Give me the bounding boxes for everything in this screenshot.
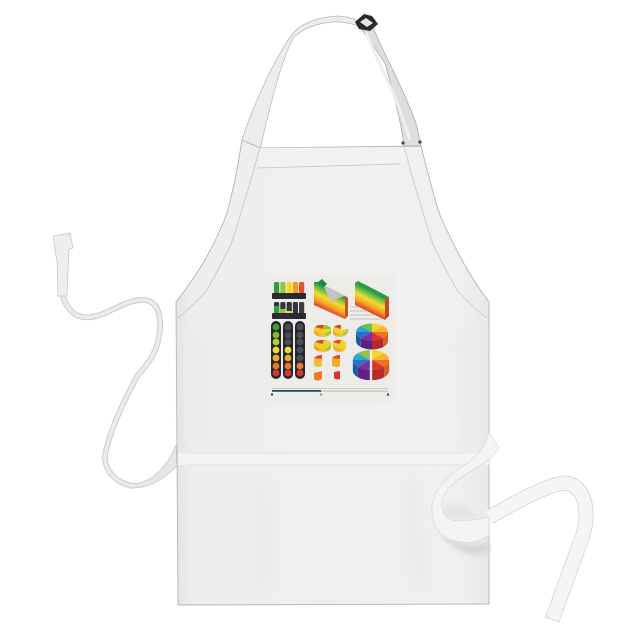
traffic light column 2 <box>283 321 293 379</box>
ring segments <box>314 325 348 380</box>
print background <box>265 275 395 403</box>
right half of exploded pie <box>372 350 389 380</box>
exploded 3D pie chart <box>353 350 389 380</box>
3D pie chart <box>356 324 388 350</box>
left armhole hem <box>178 148 260 318</box>
progress slider <box>270 388 390 396</box>
strap slider knot <box>355 14 378 31</box>
left half of exploded pie <box>353 350 370 380</box>
bib hem <box>258 147 408 168</box>
traffic light column 3 <box>295 321 305 379</box>
right tie front loop <box>432 432 586 622</box>
test tube rack: upper <box>272 282 306 299</box>
right tie back section <box>489 483 586 620</box>
waist pocket band <box>178 453 489 465</box>
isometric area chart <box>314 279 348 319</box>
left neck strap <box>242 16 358 150</box>
test tube rack: lower <box>272 302 306 319</box>
left tie <box>53 233 177 488</box>
right armhole hem <box>404 147 487 318</box>
soft fabric folds <box>195 330 468 590</box>
apron body <box>176 140 489 605</box>
traffic light column 1 <box>271 321 281 379</box>
right neck strap <box>360 27 422 146</box>
isometric block chart <box>350 281 389 320</box>
printed infographic <box>265 275 395 403</box>
